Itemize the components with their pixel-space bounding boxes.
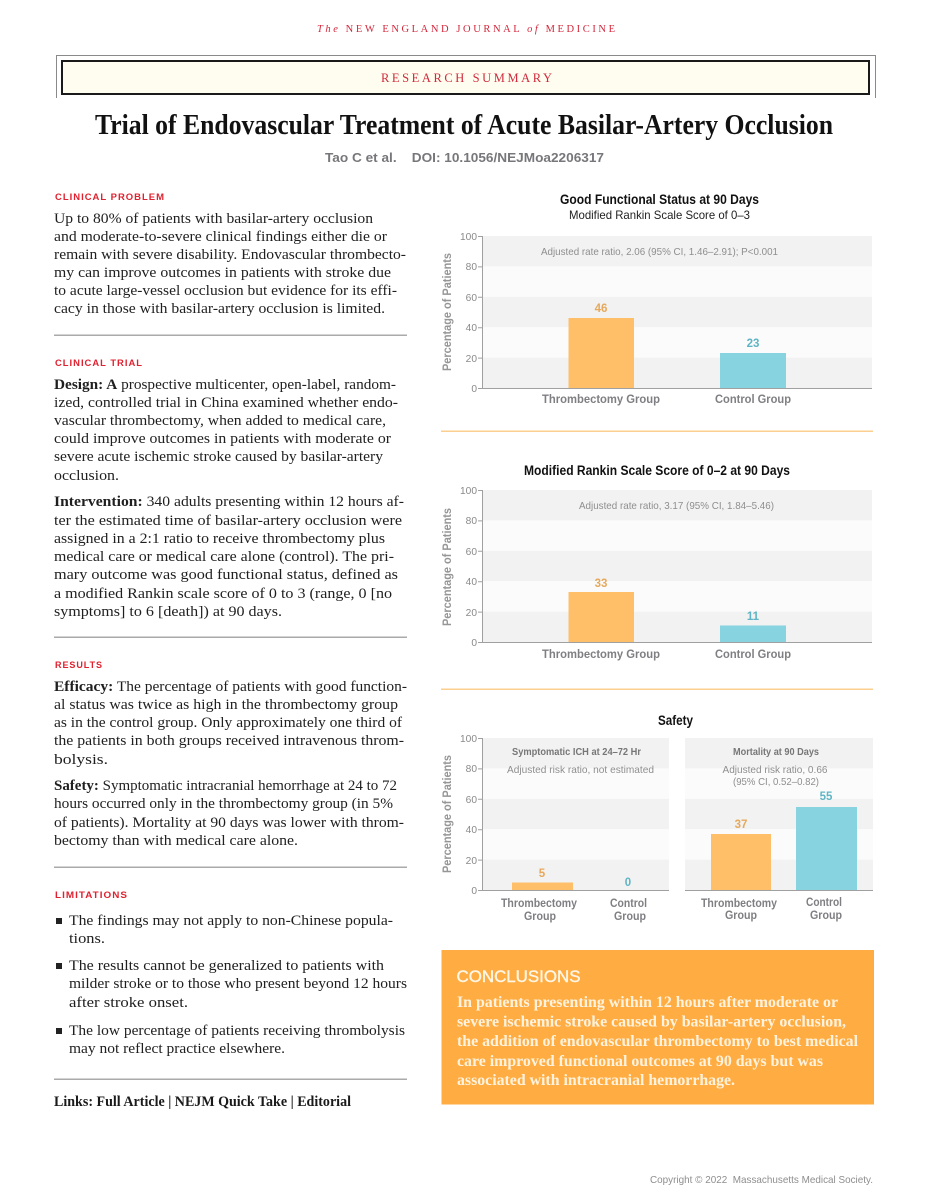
text block: clinical problem: cacy in those with basilar-artery occlusion is limited. [54,301,385,317]
banner: research summary: RESEARCH SUMMARY [381,71,552,85]
bar: thrombectomy 5: Thrombectomy [501,896,577,910]
text block: intervention: mary outcome was good functional status, defined as [54,567,398,583]
text block: intervention: ter the estimated time of basilar-artery occlusion were [54,513,402,529]
text block: efficacy: al status was twice as high in the thrombectomy group [54,697,398,713]
text block: intervention: symptoms] to 6 [death]) at 90 days. [54,604,282,620]
chart heading: Good Functional Status at 90 Days [560,192,759,207]
panel: mortality: Adjusted risk ratio, 0.66 [722,764,828,776]
text block: clinical problem: to acute large-vessel occlusion but evidence for its effi- [54,283,397,299]
chart: good functional status at 90 days: 0 [471,384,477,395]
text block: conclusions: In patients presenting within 12 hours after moderate or [457,994,838,1011]
bar: control 23: 23 [747,338,759,350]
y-axis: 20 [466,856,477,867]
bar: control 0: Group [614,909,646,923]
title: Trial of Endovascular Treatment of Acute Basilar-Artery Occlusion [95,110,833,141]
panel: symptomatic ICH: Adjusted risk ratio, not estimated [507,764,654,776]
bar: control 0: 0 [625,877,631,889]
bar: thrombectomy 33: Thrombectomy Group [542,647,660,661]
y-axis: 100 [460,734,477,745]
copyright: Copyright © 2022 Massachusetts Medical Society. [650,1174,873,1186]
chart: modified rankin 0-2 at 90 days: 0 [471,638,477,649]
panel: results [54,660,407,849]
text block: conclusions: the addition of endovascular thrombectomy to best medical [457,1033,859,1050]
y-axis: 80 [466,764,477,775]
bullet list: limitations [56,913,407,1057]
bar: control 0 [610,877,647,923]
bar: control 0: Control [610,896,647,910]
bar: thrombectomy 33: 33 [595,578,607,590]
heading: limitations: LIMITATIONS [55,890,128,901]
chart heading: Modified Rankin Scale Score of 0–3 [569,208,750,222]
bar: thrombectomy 46 [542,303,660,406]
text block: efficacy: bolysis. [54,752,108,768]
chart: good functional status at 90 days: 20 [466,354,477,365]
bullet list: limitations: The results cannot be generalized to patients with [69,958,385,974]
text block: safety: Safety: Symptomatic intracranial hemorrhage at 24 to 72 [54,778,397,794]
text block: design: occlusion. [54,468,119,484]
text block: safety: bectomy than with medical care alone. [54,833,298,849]
y-axis: 60 [466,795,477,806]
bar: control 11: 11 [747,611,760,623]
text block: clinical problem: Up to 80% of patients with basilar-artery occlusion [54,211,374,227]
bar: control 55: 55 [820,791,833,803]
bullet list: limitations: after stroke onset. [69,995,188,1011]
chart: good functional status at 90 days: 40 [466,323,477,334]
text block: intervention: a modified Rankin scale score of 0 to 3 (range, 0 [no [54,586,392,602]
text block: design [54,377,398,484]
bullet list: limitations: tions. [69,931,105,947]
links: Links: Full Article | NEJM Quick Take | Editorial [54,1094,351,1110]
heading: results: RESULTS [55,660,103,671]
text block: intervention: Intervention: 340 adults presenting within 12 hours af- [54,494,404,510]
panel: clinical problem [54,192,406,317]
heading: clinical problem: CLINICAL PROBLEM [55,192,165,203]
text block: design: severe acute ischemic stroke caused by basilar-artery [54,449,384,465]
text block: clinical problem: remain with severe disability. Endovascular thrombecto- [54,247,406,263]
text block: clinical problem: my can improve outcomes in patients with stroke due [54,265,391,281]
chart heading [560,192,759,222]
bar: thrombectomy 37 [701,819,777,922]
bar: thrombectomy 46: Thrombectomy Group [542,392,660,406]
chart: modified rankin 0-2 at 90 days: 60 [466,547,477,558]
chart: modified rankin 0-2 at 90 days: 40 [466,577,477,588]
chart: good functional status at 90 days: 60 [466,293,477,304]
text block: safety: hours occurred only in the thrombectomy group (in 5% [54,796,393,812]
bar: control 11: Control Group [715,647,791,661]
bar: control 55: Control [806,895,842,909]
chart: safety [440,713,873,923]
bullet list: limitations: The findings may not apply to non-Chinese popula- [69,913,393,929]
panel: clinical trial [54,358,404,620]
text block: safety [54,778,404,849]
bar: thrombectomy 46: 46 [595,303,607,315]
bar: control 11 [715,611,791,661]
text block: intervention: assigned in a 2:1 ratio to receive thrombectomy plus [54,531,385,547]
panel: limitations [55,890,407,1057]
chart: modified rankin 0-2 at 90 days: 20 [466,608,477,619]
text block: clinical problem [54,211,406,317]
chart heading: Modified Rankin Scale Score of 0–2 at 90 Days [524,463,790,478]
y-axis: 40 [466,825,477,836]
panel: symptomatic ICH: Symptomatic ICH at 24–72 Hr [512,746,641,758]
y-axis label: Percentage of Patients [440,253,454,371]
bullet list: limitations: may not reflect practice elsewhere. [69,1041,285,1057]
text block: safety: of patients). Mortality at 90 days was lower with throm- [54,815,404,831]
bar: thrombectomy 33 [542,578,660,661]
chart: good functional status at 90 days: 80 [466,262,477,273]
chart: good functional status at 90 days [440,192,872,406]
heading: clinical trial: CLINICAL TRIAL [55,358,143,369]
text block: design: could improve outcomes in patients with moderate or [54,431,391,447]
chart: modified rankin 0-2 at 90 days: 80 [466,516,477,527]
text block: design: vascular thrombectomy, when added to medical care, [54,413,386,429]
text block: conclusions [457,994,859,1089]
text block: clinical problem: and moderate-to-severe clinical findings either die or [54,229,387,245]
text block: intervention: medical care or medical care alone (control). The pri- [54,549,394,565]
bar: thrombectomy 5: 5 [539,868,546,880]
text block: design: ized, controlled trial in China examined whether endo- [54,395,398,411]
chart: modified rankin 0-2 at 90 days [440,463,872,661]
bullet list: limitations: milder stroke or to those who present beyond 12 hours [69,976,407,992]
journal masthead: The NEW ENGLAND JOURNAL of MEDICINE [317,24,615,35]
panel: mortality: Mortality at 90 Days [733,746,819,758]
bar: thrombectomy 37: Thrombectomy [701,896,777,910]
text block: design: Design: A prospective multicenter, open-label, random- [54,377,396,393]
y-axis: Percentage of Patients [440,755,454,873]
panel: symptomatic ICH [482,738,669,923]
authors and DOI: Tao C et al. DOI: 10.1056/NEJMoa2206317 [325,150,604,165]
bar: control 55: Group [810,908,842,922]
rate ratio note: Adjusted rate ratio, 2.06 (95% CI, 1.46–2.91); P<0.001 [541,246,778,258]
text block: efficacy: Efficacy: The percentage of patients with good function- [54,679,407,695]
bar: thrombectomy 37: Group [725,908,757,922]
y-axis [440,734,482,897]
bar: thrombectomy 37: 37 [735,819,747,831]
text block: efficacy [54,679,407,768]
rate ratio note: Adjusted rate ratio, 3.17 (95% CI, 1.84–5.46) [579,500,774,512]
panel: mortality [685,738,873,922]
chart: modified rankin 0-2 at 90 days: 100 [460,486,477,497]
heading: conclusions: CONCLUSIONS [456,967,580,986]
bar: control 23: Control Group [715,392,791,406]
bar: control 23 [715,338,791,406]
bar: control 55 [796,791,857,922]
text block: conclusions: associated with intracranial hemorrhage. [457,1072,735,1089]
bar: thrombectomy 5 [501,868,577,923]
panel: conclusions [442,950,874,1104]
panel: mortality: (95% CI, 0.52–0.82) [733,776,819,788]
text block: intervention [54,494,404,620]
y-axis: 0 [471,886,477,897]
bar: thrombectomy 5: Group [524,909,556,923]
chart: good functional status at 90 days: 100 [460,232,477,243]
text block: conclusions: severe ischemic stroke caused by basilar-artery occlusion, [457,1014,846,1030]
banner: research summary [56,56,876,98]
text block: efficacy: as in the control group. Only approximately one third of [54,715,402,731]
y-axis label: Percentage of Patients [440,508,454,626]
text block: conclusions: care improved functional outcomes at 90 days but was [457,1053,823,1070]
text block: efficacy: the patients in both groups received intravenous throm- [54,733,404,749]
bullet list: limitations: The low percentage of patients receiving thrombolysis [69,1023,405,1039]
chart heading: Safety [658,713,693,728]
